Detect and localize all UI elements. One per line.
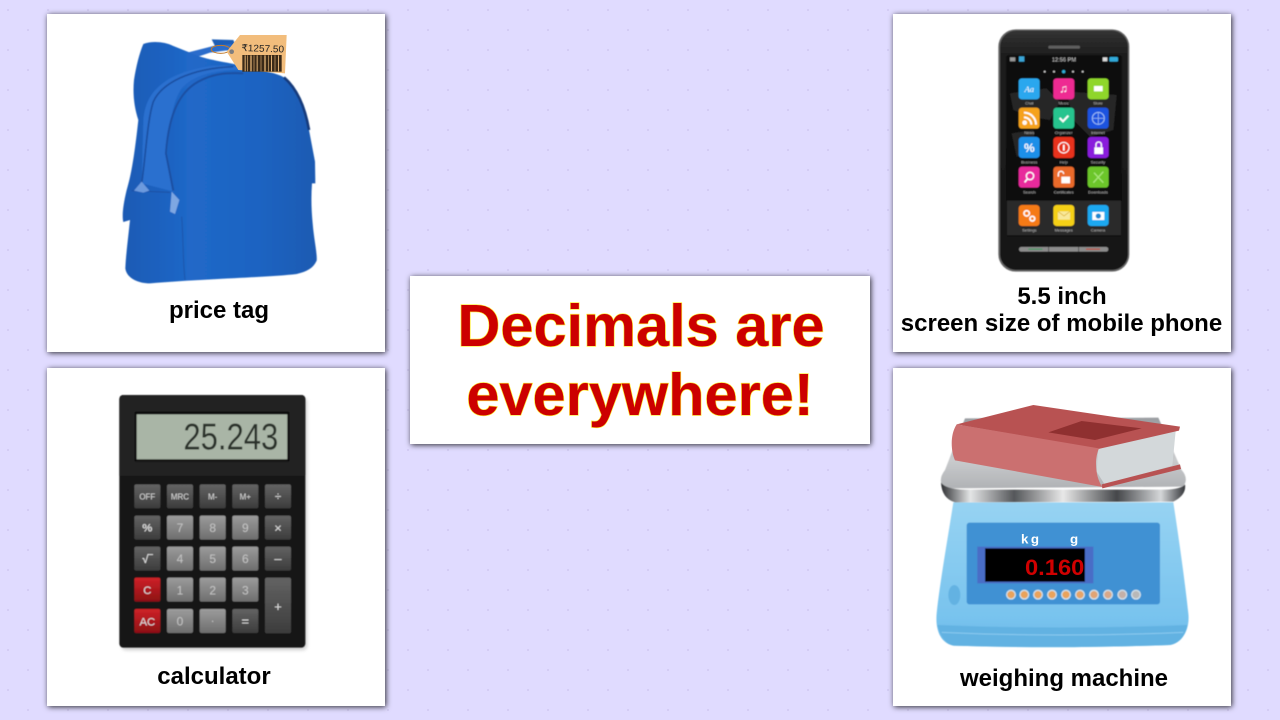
book	[952, 405, 1181, 488]
calculator keys: 7	[177, 521, 184, 535]
icon: weighing scale with book	[936, 405, 1189, 647]
panel: mobile phone	[893, 14, 1231, 352]
label: price tag: price tag	[169, 297, 269, 324]
calculator keys: M+	[240, 493, 251, 502]
calculator keys: OFF	[139, 493, 155, 502]
panel: calculator	[47, 368, 385, 706]
app icons: News	[1024, 130, 1034, 135]
app icons: Downloads	[1088, 189, 1108, 194]
calculator keys: 0	[177, 614, 184, 628]
title: everywhere!	[466, 361, 814, 428]
label: screen size of mobile phone: screen size of mobile phone	[901, 310, 1222, 337]
calculator keys: ÷	[275, 489, 282, 503]
calculator keys: ×	[274, 520, 282, 535]
calculator keys: 5	[209, 552, 216, 566]
title: Decimals are	[457, 292, 825, 359]
scale units g: g	[1070, 531, 1078, 546]
panel: weighing machine	[893, 368, 1231, 706]
panel: title	[410, 276, 870, 444]
title	[457, 292, 825, 428]
calculator keys: C	[143, 585, 151, 597]
label: weighing machine: weighing machine	[959, 665, 1168, 692]
label: calculator: calculator	[157, 663, 271, 690]
scale reading: 0.160	[1025, 555, 1084, 580]
app icons: Settings	[1022, 227, 1037, 232]
icon: smartphone	[998, 29, 1129, 272]
app icons: Security	[1091, 159, 1105, 164]
app icons: Chat	[1025, 100, 1034, 105]
app icons: Certificates	[1054, 189, 1074, 194]
app icons: Aa	[1024, 84, 1034, 94]
label: phone size: 5.5 inch	[1017, 283, 1107, 310]
icon: calculator	[119, 395, 307, 650]
scale units kg: kg	[1021, 531, 1039, 546]
app icons: Messages	[1055, 227, 1073, 232]
app icons: Help	[1060, 159, 1069, 164]
panel: price tag	[47, 14, 385, 352]
calculator keys: %	[142, 523, 152, 535]
app icons: ♫	[1059, 84, 1068, 96]
calculator keys: 6	[242, 552, 249, 566]
calculator keys: 9	[242, 521, 249, 535]
calculator keys: MRC	[171, 493, 189, 502]
calculator keys: 2	[209, 583, 216, 597]
app icons: Music	[1058, 100, 1069, 105]
app icons: Search	[1023, 189, 1036, 194]
calculator keys: 4	[177, 552, 184, 566]
app icons: Organizer	[1055, 130, 1073, 135]
app icons: Business	[1021, 159, 1037, 164]
calculator keys: 3	[242, 583, 249, 597]
app icons: Internet	[1091, 130, 1106, 135]
app icons: Store	[1093, 100, 1104, 105]
app icons: %	[1024, 141, 1035, 155]
icon: smartphone: 12:56 PM	[1052, 57, 1076, 63]
calculator keys: –	[274, 551, 282, 566]
barcode	[242, 55, 282, 72]
tag price: ₹1257.50	[241, 43, 284, 55]
calculator keys	[134, 484, 291, 633]
calculator keys: AC	[139, 616, 155, 628]
calculator keys: 8	[209, 521, 216, 535]
calculator keys: √‾	[142, 554, 154, 566]
app icons	[1019, 78, 1109, 232]
calculator keys: 1	[177, 583, 184, 597]
app icons: Camera	[1091, 227, 1106, 232]
calculator keys: =	[241, 614, 249, 629]
calculator keys: M-	[208, 493, 218, 502]
icon: blue backpack with price tag	[123, 35, 317, 283]
calculator keys: +	[274, 599, 282, 614]
scale number buttons	[1007, 590, 1140, 599]
calculator display: 25.243	[183, 416, 278, 457]
calculator keys: ·	[211, 613, 215, 627]
